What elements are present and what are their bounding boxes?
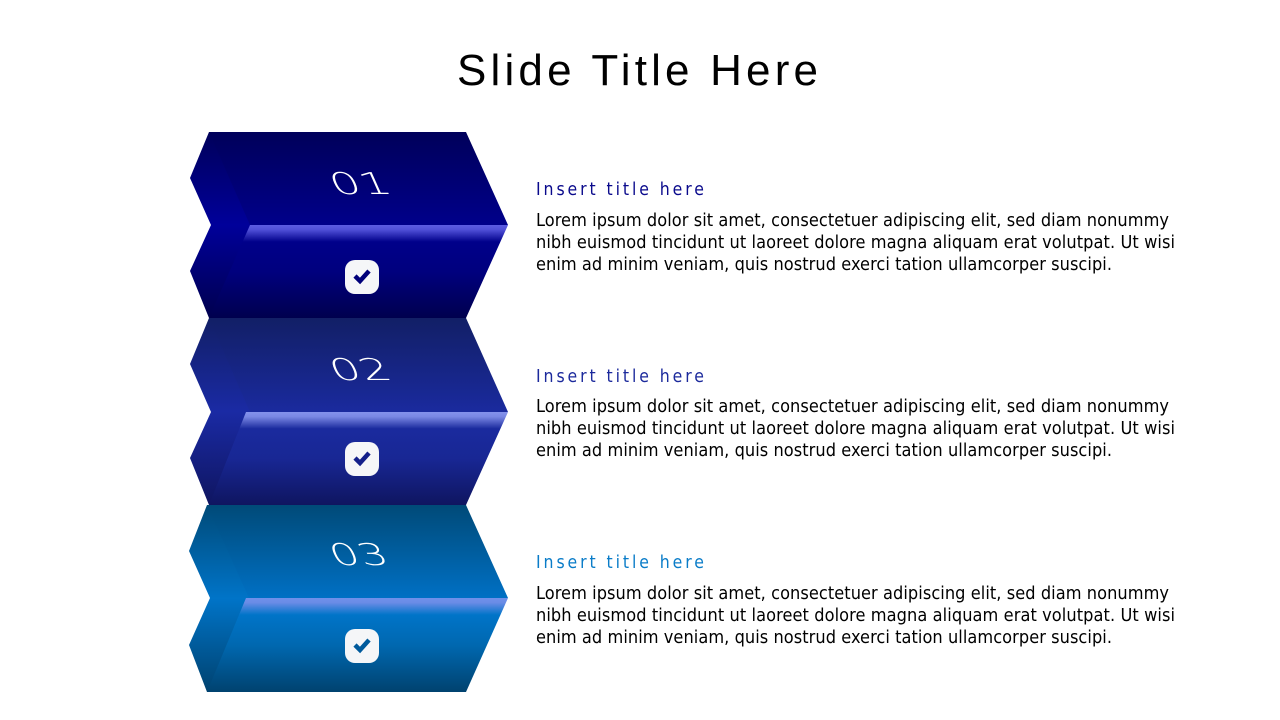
body 1: enim ad minim veniam, quis nostrud exerci tation ullamcorper suscipi.: [536, 254, 1112, 275]
body 2: [536, 396, 1175, 461]
chevron 2 lower face: [209, 412, 508, 505]
text block 3: [536, 553, 1175, 648]
body 3: enim ad minim veniam, quis nostrud exerci tation ullamcorper suscipi.: [536, 627, 1112, 648]
number 01: 01: [323, 167, 397, 201]
chevron 3 lower face: [207, 598, 508, 692]
heading 2: Insert title here: [536, 367, 704, 387]
chevron 1: [190, 132, 508, 318]
icon: check 3: [345, 629, 379, 663]
body 3: nibh euismod tincidunt ut laoreet dolore magna aliquam erat volutpat. Ut wisi: [536, 605, 1175, 626]
icon: check 2: [345, 442, 379, 476]
chevron 1 upper face: [209, 132, 508, 225]
body 1: [536, 210, 1175, 275]
number 02: 02: [323, 353, 397, 387]
chevron 2 upper face: [209, 318, 508, 412]
text block 1: [536, 180, 1175, 275]
body 2: enim ad minim veniam, quis nostrud exerci tation ullamcorper suscipi.: [536, 440, 1112, 461]
chevron 3: [189, 505, 508, 692]
heading 3: Insert title here: [536, 553, 704, 573]
body 1: Lorem ipsum dolor sit amet, consectetuer adipiscing elit, sed diam nonummy: [536, 210, 1169, 231]
heading 1: Insert title here: [536, 180, 704, 200]
chevron 2 left face: [190, 318, 262, 505]
icon: check 1: [345, 260, 379, 294]
text block 2: [536, 367, 1175, 461]
body 2: nibh euismod tincidunt ut laoreet dolore magna aliquam erat volutpat. Ut wisi: [536, 418, 1175, 439]
body 2: Lorem ipsum dolor sit amet, consectetuer adipiscing elit, sed diam nonummy: [536, 396, 1169, 417]
body 3: [536, 583, 1175, 648]
body 1: nibh euismod tincidunt ut laoreet dolore magna aliquam erat volutpat. Ut wisi: [536, 232, 1175, 253]
chevron 3 upper face: [207, 505, 508, 598]
chevron 3 left face: [189, 505, 262, 692]
body 3: Lorem ipsum dolor sit amet, consectetuer adipiscing elit, sed diam nonummy: [536, 583, 1169, 604]
title: Slide Title Here: [457, 46, 818, 95]
chevron 1 left face: [190, 132, 262, 318]
number 03: 03: [323, 538, 395, 573]
chevron 2: [190, 318, 508, 505]
chevron 1 lower face: [209, 225, 508, 318]
